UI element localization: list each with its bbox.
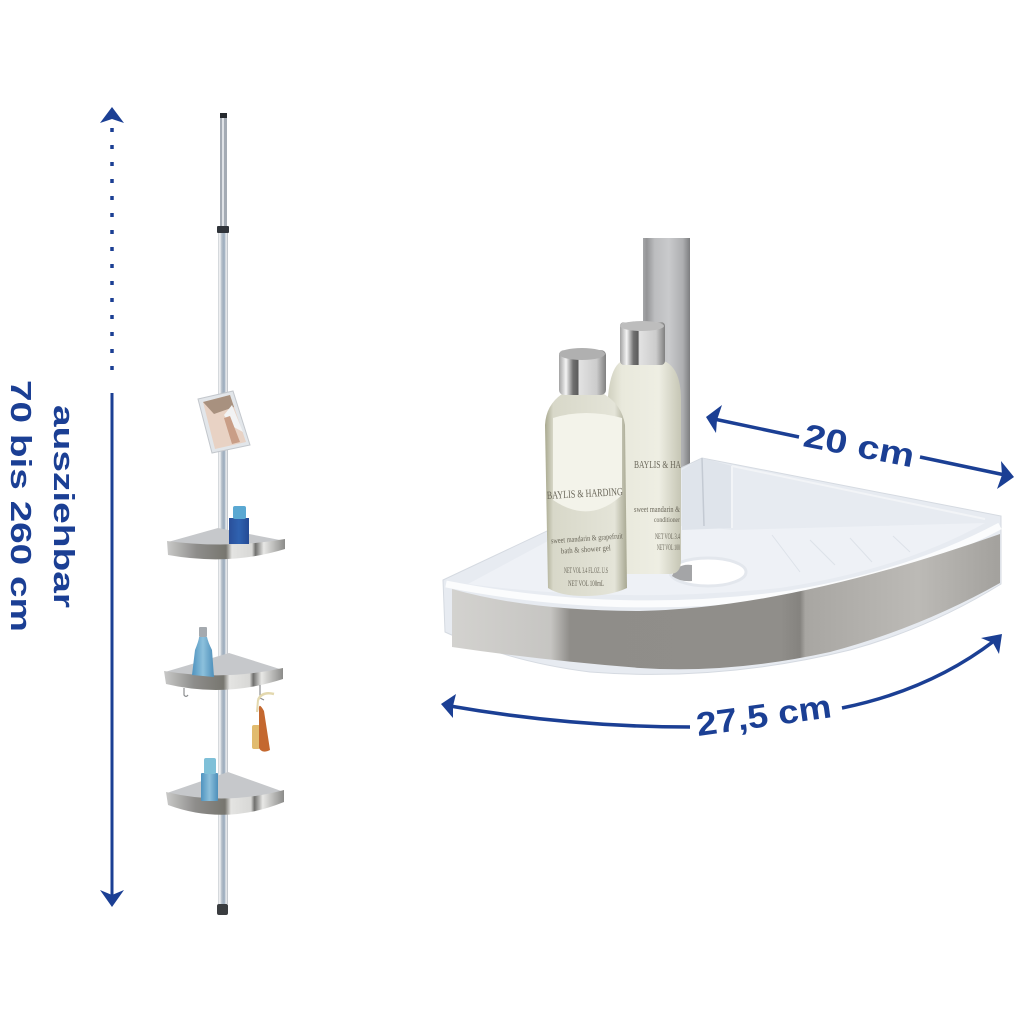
bottom shelf — [166, 758, 284, 815]
conditioner bottle: conditioner — [654, 516, 681, 524]
full shower rack product — [164, 113, 285, 915]
height label: ausziehbar — [47, 405, 79, 608]
mirror — [198, 391, 250, 453]
height label: 70 bis 260 cm — [4, 380, 36, 632]
telescopic pole — [217, 113, 229, 915]
tray body — [443, 458, 1001, 674]
shower gel bottle — [545, 348, 627, 596]
height dimension arrow — [100, 107, 124, 907]
shower gel bottle: bath & shower gel — [561, 543, 612, 556]
shower gel bottle: NET VOL 3.4 FL.OZ. U.S — [564, 566, 608, 575]
middle shelf — [164, 627, 283, 690]
close-up corner shelf — [443, 238, 1001, 674]
shower gel bottle: sweet mandarin & grapefruit — [551, 531, 624, 545]
width dimension: 27,5 cm — [441, 634, 1002, 743]
shower gel bottle: BAYLIS & HARDING — [547, 486, 623, 502]
conditioner bottle: BAYLIS & HA — [634, 459, 681, 471]
width dimension: 27,5 cm: 27,5 cm — [694, 687, 834, 743]
conditioner bottle: sweet mandarin & — [634, 505, 681, 514]
conditioner bottle: NET VOL 100 — [657, 543, 680, 552]
depth dimension: 20 cm: 20 cm — [801, 417, 918, 474]
conditioner bottle — [607, 321, 681, 574]
large pole — [643, 238, 690, 468]
top shelf — [167, 506, 285, 559]
height label — [4, 380, 79, 632]
drain hole — [670, 558, 746, 586]
shower gel bottle: NET VOL 100mL — [568, 579, 604, 588]
conditioner bottle: NET VOL 3.4 — [655, 532, 680, 541]
stainless steel front band — [452, 534, 1000, 669]
depth dimension: 20 cm — [706, 405, 1014, 489]
hooks — [184, 685, 264, 700]
nail brush — [252, 693, 274, 752]
